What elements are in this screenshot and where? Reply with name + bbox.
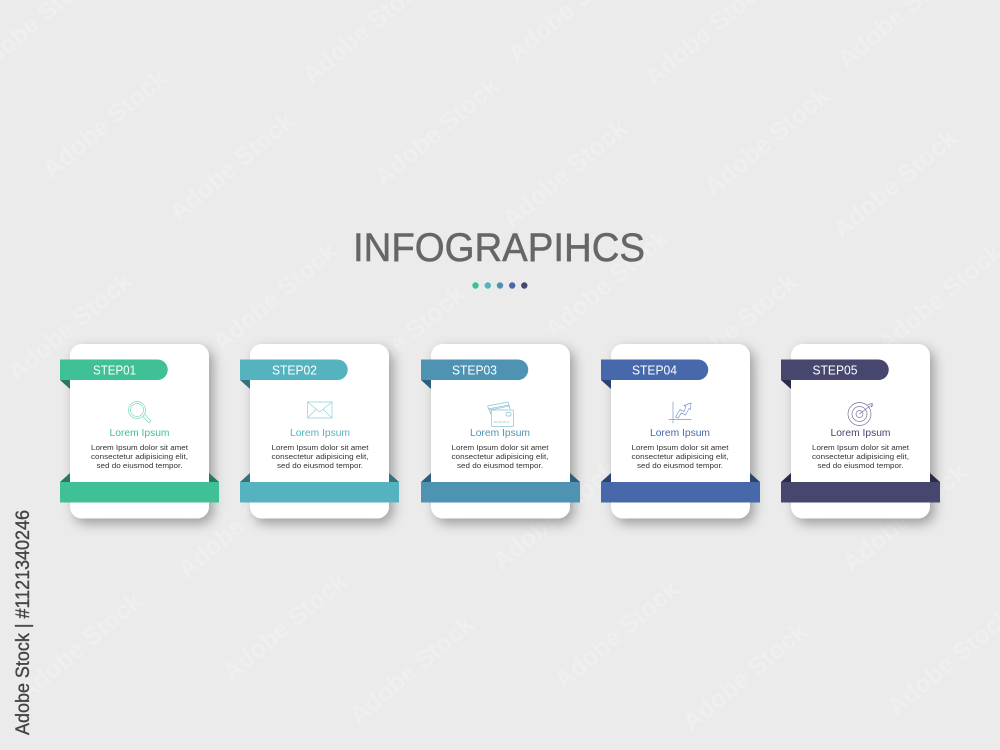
watermark pattern: Adobe Stock	[497, 114, 632, 234]
step label: STEP03	[452, 364, 497, 378]
body text: sed do eiusmod tempor.	[96, 461, 182, 470]
bottom band	[781, 482, 940, 502]
bottom band	[60, 482, 219, 502]
step label: STEP05	[812, 364, 858, 378]
fold shadows	[601, 380, 760, 482]
item heading: Lorem Ipsum	[110, 427, 170, 439]
step label: STEP02	[272, 364, 317, 378]
icon: target	[848, 402, 873, 426]
step ribbon	[240, 360, 348, 380]
watermark pattern: Adobe Stock	[699, 82, 834, 202]
fold shadows	[421, 380, 580, 482]
icon: credit cards	[488, 402, 514, 426]
icon: magnifier	[128, 402, 151, 423]
body text: consectetur adipisicing elit,	[272, 452, 368, 461]
bottom band	[240, 482, 399, 502]
icon: growth chart	[669, 402, 691, 423]
fold shadows	[240, 380, 399, 482]
watermark pattern: Adobe Stock	[677, 617, 812, 737]
body text: consectetur adipisicing elit,	[452, 452, 548, 461]
icon: envelope	[308, 402, 332, 418]
body text	[272, 443, 369, 470]
panel: step 4	[601, 344, 760, 518]
body text	[812, 443, 910, 470]
body text: Lorem Ipsum dolor sit amet	[452, 443, 549, 452]
body text: consectetur adipisicing elit,	[632, 452, 728, 461]
body text: consectetur adipisicing elit,	[812, 452, 909, 461]
watermark pattern: Adobe Stock	[827, 124, 962, 244]
body text: Lorem Ipsum dolor sit amet	[632, 443, 729, 452]
watermark pattern: Adobe Stock	[335, 280, 470, 400]
panel: step 3	[421, 344, 580, 518]
panel: step 1	[60, 344, 219, 518]
step ribbon	[781, 360, 889, 380]
panel: step 2	[240, 344, 399, 518]
card	[791, 344, 930, 518]
step ribbon	[60, 360, 168, 380]
watermark pattern: Adobe Stock	[164, 107, 299, 227]
card	[250, 344, 389, 518]
watermark pattern: Adobe Stock	[2, 267, 137, 387]
step label: STEP04	[632, 364, 677, 378]
watermark pattern: Adobe Stock	[539, 224, 674, 344]
body text: sed do eiusmod tempor.	[457, 461, 543, 470]
body text	[452, 443, 549, 470]
title dots	[472, 282, 528, 289]
watermark pattern: Adobe Stock	[344, 610, 479, 730]
bottom band	[601, 482, 760, 502]
body text	[632, 443, 729, 470]
body text: sed do eiusmod tempor.	[277, 461, 363, 470]
item heading: Lorem Ipsum	[830, 427, 891, 439]
card	[611, 344, 750, 518]
item heading: Lorem Ipsum	[650, 427, 710, 439]
watermark pattern: Adobe Stock	[487, 456, 622, 576]
stock id label: Adobe Stock | #1121340246	[13, 510, 34, 735]
watermark pattern: Adobe Stock	[172, 464, 307, 584]
body text: Lorem Ipsum dolor sit amet	[272, 443, 369, 452]
body text: sed do eiusmod tempor.	[637, 461, 723, 470]
watermark pattern: Adobe Stock	[37, 64, 172, 184]
step ribbon	[421, 360, 528, 380]
body text: Lorem Ipsum dolor sit amet	[812, 443, 910, 452]
watermark pattern: Adobe Stock	[207, 237, 342, 357]
item heading: Lorem Ipsum	[470, 427, 530, 439]
body text: sed do eiusmod tempor.	[818, 461, 904, 470]
body text	[91, 443, 189, 470]
fold shadows	[781, 380, 940, 482]
step label: STEP01	[93, 364, 136, 378]
watermark pattern: Adobe Stock	[369, 72, 504, 192]
title: INFOGRAPIHCS	[353, 226, 645, 270]
fold shadows	[60, 380, 219, 482]
body text: consectetur adipisicing elit,	[91, 452, 188, 461]
step ribbon	[601, 360, 708, 380]
body text: Lorem Ipsum dolor sit amet	[91, 443, 189, 452]
watermark pattern: Adobe Stock	[217, 567, 352, 687]
card	[431, 344, 570, 518]
watermark pattern: Adobe Stock	[12, 587, 147, 707]
bottom band	[421, 482, 580, 502]
panel: step 5	[781, 344, 940, 518]
watermark pattern: Adobe Stock	[667, 268, 802, 388]
watermark pattern: Adobe Stock	[549, 575, 684, 695]
watermark pattern: Adobe Stock	[837, 458, 972, 578]
card	[70, 344, 209, 518]
item heading: Lorem Ipsum	[290, 427, 350, 439]
